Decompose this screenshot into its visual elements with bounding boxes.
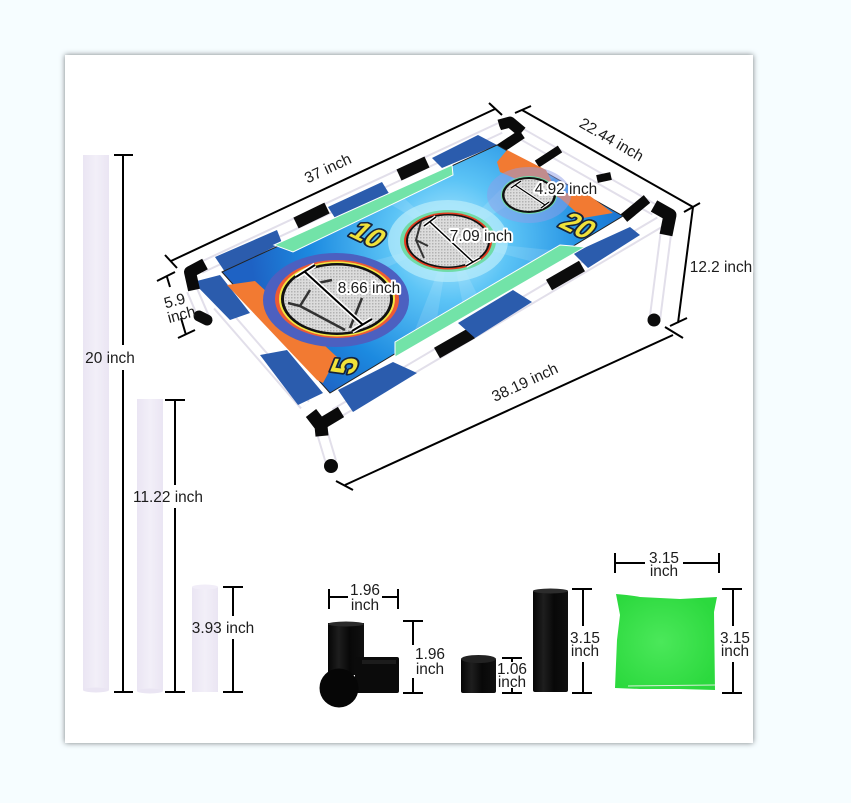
label elbow height: inch xyxy=(416,661,444,678)
label sleeve xyxy=(570,630,600,660)
hole dimension 8.66 inch xyxy=(296,265,400,331)
green strip top xyxy=(274,165,453,252)
medium tube 11.22 inch xyxy=(137,399,185,694)
black sleeve xyxy=(533,588,568,692)
orange panel left xyxy=(227,281,337,383)
hole dimension 4.92 inch xyxy=(511,181,597,208)
dimension: 37 inch xyxy=(165,103,502,268)
label 5.9 inch: 5.9 xyxy=(162,290,187,312)
label elbow height: 1.96 xyxy=(415,646,445,663)
score 10: 10 xyxy=(342,217,393,254)
green strip bottom xyxy=(395,245,585,357)
label sleeve: 3.15 xyxy=(570,630,600,647)
dimension: sleeve xyxy=(572,589,592,693)
label 22.44 inch: 22.44 inch xyxy=(576,115,646,165)
front left leg xyxy=(192,290,207,320)
dimension: bag height xyxy=(722,589,742,693)
target 10 hole xyxy=(388,200,508,282)
label 38.19 inch: 38.19 inch xyxy=(489,360,561,406)
label bag width xyxy=(649,550,679,580)
orange panel right xyxy=(497,150,613,218)
target 5 hole xyxy=(263,253,409,347)
corner elbow right xyxy=(654,206,670,235)
label sleeve: inch xyxy=(571,643,599,660)
label 37 inch: 37 inch xyxy=(302,151,354,187)
label 12.2 inch: 12.2 inch xyxy=(690,259,752,276)
label bag width: inch xyxy=(650,563,678,580)
front long pipe xyxy=(335,222,660,414)
score 5: 5 xyxy=(322,356,368,376)
label end cap: 1.06 xyxy=(497,661,527,678)
rear right pipe xyxy=(498,122,655,218)
dimension: 20 inch xyxy=(114,155,133,692)
label end cap xyxy=(497,661,527,691)
label 3.93 inch: 3.93 inch xyxy=(192,620,254,637)
dimension: 5.9 inch xyxy=(157,272,195,338)
dimension: 11.22 inch xyxy=(165,400,185,692)
dimension: end cap xyxy=(502,658,522,693)
label elbow width: 1.96 xyxy=(350,582,380,599)
corner elbow left xyxy=(190,264,205,290)
label 5.9 inch: inch xyxy=(166,303,197,327)
dimension: elbow height xyxy=(403,621,423,693)
label end cap: inch xyxy=(498,674,526,691)
label 20 inch: 20 inch xyxy=(85,350,135,367)
dimension: bag width xyxy=(615,553,719,573)
label elbow width: inch xyxy=(351,597,379,614)
long tube 20 inch xyxy=(83,155,133,692)
printed target mat xyxy=(221,144,624,394)
infographic canvas xyxy=(60,50,758,748)
dimension: 12.2 inch xyxy=(670,207,693,326)
short tube 3.93 inch xyxy=(192,584,243,692)
label elbow width xyxy=(350,582,380,614)
end cap xyxy=(461,655,496,693)
hole dimension 7.09 inch xyxy=(424,217,512,266)
green bean bag xyxy=(615,594,717,690)
label bag height: inch xyxy=(721,643,749,660)
label 5.9 inch xyxy=(162,289,197,327)
right leg xyxy=(648,232,666,326)
target 20 hole xyxy=(487,167,571,223)
mat flaps xyxy=(193,135,640,412)
dimension: 3.93 inch xyxy=(223,587,243,692)
label 11.22 inch: 11.22 inch xyxy=(133,489,203,506)
label bag width: 3.15 xyxy=(649,550,679,567)
dimension: elbow width xyxy=(329,589,398,609)
label 7.09 inch: 7.09 inch xyxy=(450,228,512,245)
game frame and mat xyxy=(190,122,670,473)
white panel xyxy=(65,55,753,743)
elbow connector xyxy=(320,622,399,708)
label 8.66 inch: 8.66 inch xyxy=(338,280,400,297)
dimension: 22.44 inch xyxy=(515,106,700,212)
label elbow height xyxy=(415,646,445,678)
left short pipe xyxy=(218,305,305,405)
label bag height: 3.15 xyxy=(720,630,750,647)
score 20: 20 xyxy=(552,208,603,245)
dimension: 38.19 inch xyxy=(336,327,683,490)
corner elbow bottom with leg xyxy=(311,412,341,473)
label bag height xyxy=(720,630,750,660)
back long pipe xyxy=(200,128,500,268)
label 4.92 inch: 4.92 inch xyxy=(535,181,597,198)
